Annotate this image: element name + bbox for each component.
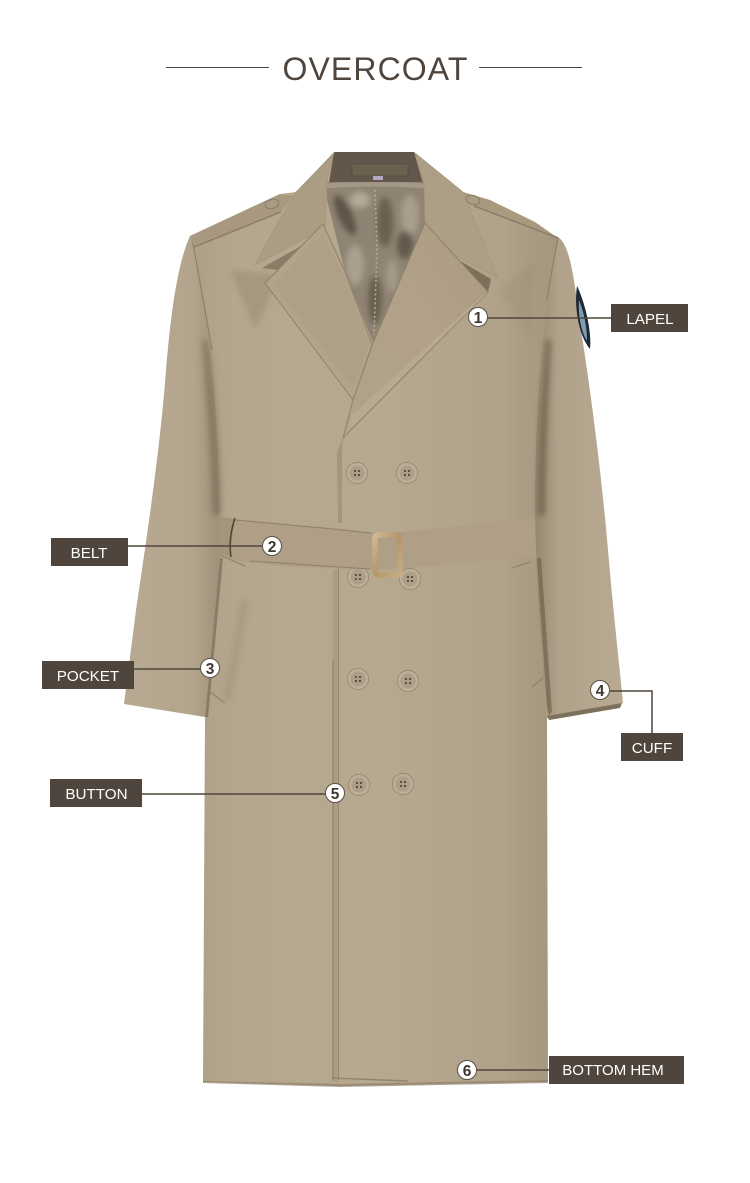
left epaulette	[190, 194, 293, 247]
left collar	[255, 153, 334, 265]
callout 6: bottom hem: 6	[463, 1063, 472, 1080]
callout 5: button: 5	[331, 786, 340, 803]
belt	[218, 516, 536, 570]
right lapel	[343, 223, 488, 438]
callout 1: lapel: LAPEL	[626, 311, 674, 328]
pockets	[210, 555, 544, 703]
callout 4: cuff: 4	[596, 683, 605, 700]
left lapel	[265, 224, 372, 400]
title: OVERCOAT	[282, 51, 469, 87]
callout 1: lapel: 1	[474, 310, 483, 327]
left sleeve	[124, 236, 222, 717]
callout 2: belt: BELT	[71, 545, 107, 562]
callout 2: belt: 2	[268, 539, 276, 556]
callout 3: pocket: 3	[206, 661, 215, 678]
sleeve seam shadows	[537, 558, 552, 715]
sleeve patch	[576, 286, 590, 349]
collar inner band	[329, 152, 423, 183]
right collar shadow	[433, 245, 491, 292]
left collar shadow	[262, 232, 322, 270]
callout 3: pocket	[42, 658, 220, 689]
buttons	[346, 462, 421, 796]
belt buckle	[375, 535, 400, 575]
callout 4: cuff	[590, 680, 683, 761]
callout 5: button: BUTTON	[65, 786, 128, 803]
cuff edge	[547, 703, 622, 720]
right sleeve	[530, 237, 623, 718]
callout 6: bottom hem: BOTTOM HEM	[562, 1062, 664, 1079]
satin lining	[327, 182, 425, 342]
overcoat illustration	[124, 152, 623, 1087]
right collar	[415, 153, 497, 277]
callout 1: lapel	[468, 304, 688, 332]
callout 5: button	[50, 779, 344, 807]
hem shadow	[203, 1080, 548, 1087]
right epaulette	[463, 192, 558, 238]
fold shadows	[202, 260, 551, 700]
callout 4: cuff: CUFF	[632, 740, 672, 757]
callout 3: pocket: POCKET	[57, 668, 119, 685]
front placket	[337, 438, 343, 523]
callout 2: belt	[51, 536, 282, 566]
armhole seams	[192, 238, 558, 350]
coat body	[190, 152, 558, 1086]
callout 6: bottom hem	[458, 1056, 684, 1084]
